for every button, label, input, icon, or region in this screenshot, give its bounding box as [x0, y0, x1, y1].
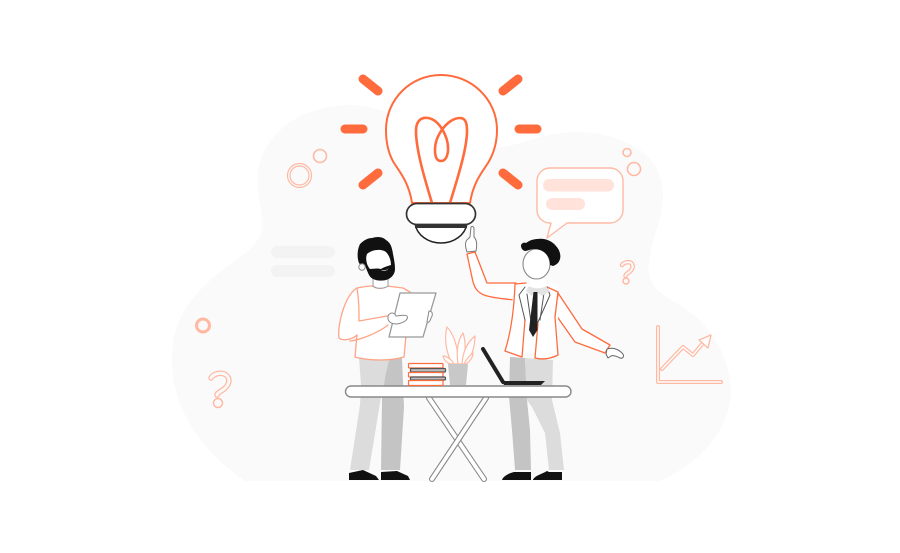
potted plant — [443, 327, 475, 385]
question mark left — [211, 373, 229, 408]
right man tie — [529, 292, 538, 337]
bulb cap dome — [415, 224, 467, 243]
bulb collar — [406, 204, 476, 224]
right man lapels — [519, 287, 550, 322]
question mark right — [622, 262, 633, 284]
left man hand — [388, 313, 407, 324]
right man raised arm — [467, 252, 516, 300]
right man hair — [521, 239, 560, 266]
left man neck — [373, 276, 388, 288]
line chart icon — [658, 327, 721, 382]
bulb cap band — [415, 224, 467, 228]
table top — [346, 386, 571, 397]
right man trousers — [509, 357, 531, 470]
clipboard — [389, 293, 436, 337]
book stack — [408, 364, 446, 386]
background blob — [172, 105, 731, 481]
right man jacket right panel — [535, 287, 558, 359]
table — [346, 386, 571, 479]
right man extended arm — [556, 293, 610, 353]
left man shoes — [349, 470, 379, 480]
right man face — [523, 249, 550, 279]
right man shoes — [502, 472, 531, 480]
right man jacket left panel — [505, 283, 526, 357]
light rays — [345, 79, 537, 185]
grey placeholder bars — [271, 246, 335, 277]
table legs — [429, 398, 486, 479]
plant pot — [448, 364, 468, 385]
left man mouth — [381, 268, 389, 271]
right man shirt — [505, 284, 558, 356]
right man open hand — [606, 348, 623, 358]
left man ear — [359, 264, 365, 270]
laptop — [483, 349, 545, 385]
filament — [416, 118, 467, 203]
light bulb — [386, 75, 497, 243]
right man pointing hand — [466, 226, 477, 252]
left man face — [366, 250, 391, 269]
right man collar — [526, 286, 550, 296]
speech bubble — [537, 168, 623, 238]
left man trousers — [350, 358, 389, 470]
right man neck — [530, 272, 546, 288]
decorative circles right — [623, 148, 640, 176]
left man shirt — [339, 286, 410, 360]
left man hair and beard — [358, 237, 395, 281]
man left — [339, 237, 436, 480]
bulb glass — [386, 75, 497, 203]
decorative circles left — [196, 150, 326, 332]
man right — [466, 226, 623, 480]
